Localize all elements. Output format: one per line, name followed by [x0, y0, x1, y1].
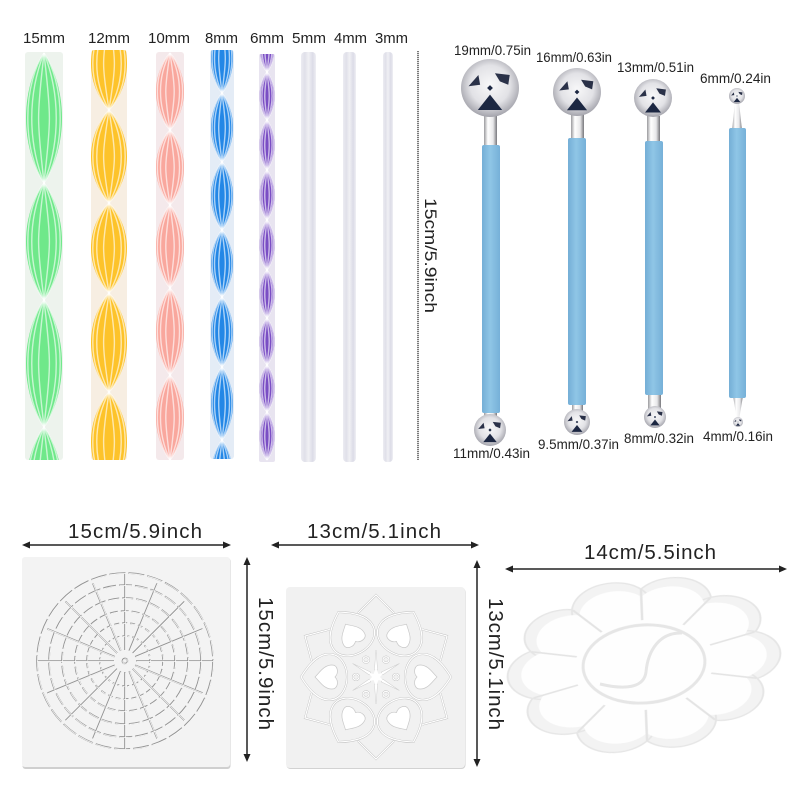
panel: acrylic rods [24, 33, 437, 462]
label 5mm: 5mm [292, 31, 326, 47]
label top 16mm: 16mm/0.63in [536, 50, 612, 65]
stencil sheet with flower [276, 586, 476, 769]
palette tray [504, 568, 784, 762]
label bottom 9.5mm: 9.5mm/0.37in [538, 437, 619, 452]
center well [580, 621, 708, 707]
label 3mm: 3mm [375, 31, 408, 47]
height dimension arrow [474, 560, 507, 767]
rod 3mm clear [375, 31, 408, 462]
label top 19mm: 19mm/0.75in [454, 43, 531, 58]
rod 10mm pink [148, 31, 190, 460]
rod 6mm purple [250, 25, 284, 462]
stencil sheet with wheel [22, 557, 230, 769]
width dimension arrow [271, 520, 479, 548]
height dimension arrow: 15cm/5.9inch [254, 597, 277, 730]
rod length dimension: 15cm/5.9inch [421, 198, 440, 313]
label top 13mm: 13mm/0.51in [617, 60, 694, 75]
label 8mm: 8mm [205, 31, 238, 47]
label bottom 8mm: 8mm/0.32in [624, 431, 694, 446]
tool 4 [700, 71, 773, 444]
label 6mm: 6mm [250, 31, 284, 47]
tool 2 [536, 50, 619, 452]
label 15mm: 15mm [23, 31, 65, 47]
rod 8mm blue [206, 33, 237, 459]
label top 6mm: 6mm/0.24in [700, 71, 771, 86]
width dimension arrow: 13cm/5.1inch [307, 520, 441, 543]
width dimension arrow [505, 541, 787, 572]
width dimension arrow: 15cm/5.9inch [68, 520, 202, 543]
height dimension arrow [244, 557, 277, 762]
label bottom 11mm: 11mm/0.43in [453, 446, 530, 461]
height dimension arrow: 13cm/5.1inch [484, 598, 507, 730]
label 4mm: 4mm [334, 31, 367, 47]
label 12mm: 12mm [88, 31, 130, 47]
width dimension arrow [22, 520, 231, 548]
rod 12mm yellow [89, 33, 129, 460]
panel: ball stylus tools [453, 43, 773, 461]
label 10mm: 10mm [148, 31, 190, 47]
panel: round grid stencil [22, 520, 277, 769]
rod 5mm clear [292, 31, 326, 462]
tool 1 [453, 43, 531, 461]
divider curve [600, 633, 682, 687]
panel: mandala stencil [271, 520, 507, 769]
panel: flower paint palette [504, 541, 787, 762]
tool 3 [617, 60, 694, 446]
rod 4mm clear [334, 31, 367, 462]
label bottom 4mm: 4mm/0.16in [703, 429, 773, 444]
rod 15mm green [24, 33, 64, 460]
width dimension arrow: 14cm/5.5inch [584, 541, 716, 564]
